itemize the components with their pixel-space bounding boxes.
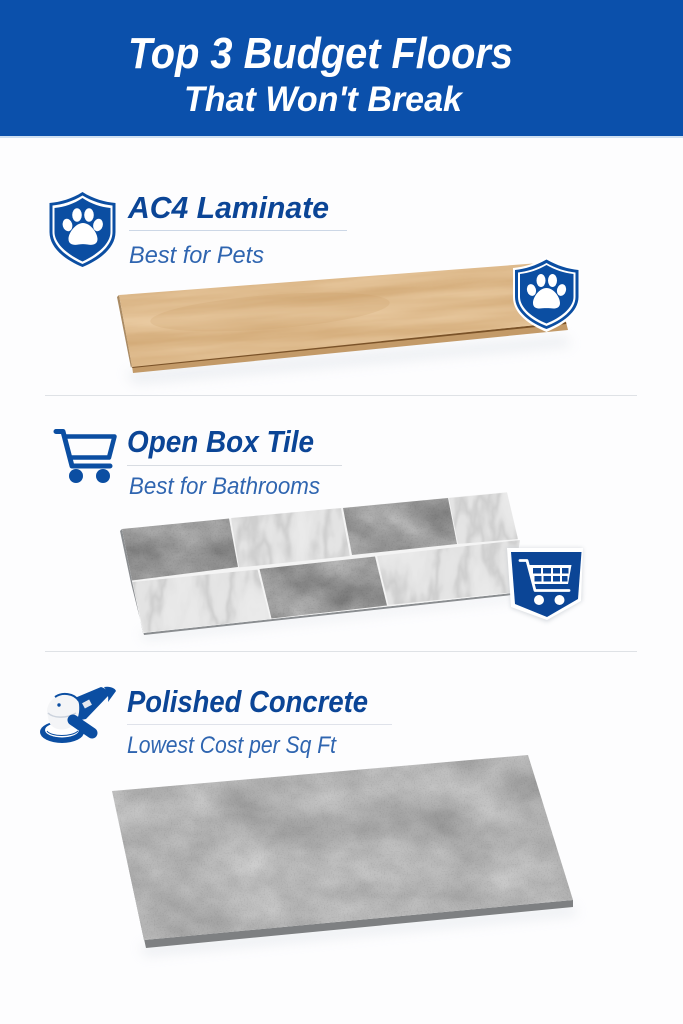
panel: Open Box Tile — [56, 424, 583, 640]
panel: Polished Concrete — [40, 684, 578, 956]
heading: Polished Concrete: Polished Concrete — [127, 684, 368, 719]
tile strip — [120, 492, 520, 640]
grinder body — [70, 687, 109, 722]
icon: paw shield — [50, 192, 116, 267]
panel: AC4 Laminate — [50, 190, 596, 424]
title: That Won't Break — [184, 80, 463, 119]
badge: shopping cart — [507, 548, 583, 622]
concrete slab — [112, 755, 578, 956]
subheading: Best for Bathrooms: Best for Bathrooms — [129, 473, 320, 500]
title — [128, 29, 513, 119]
grinder head — [47, 694, 79, 729]
grinder base disc — [40, 721, 84, 743]
badge: paw shield — [513, 257, 580, 332]
subheading: Lowest Cost per Sq Ft: Lowest Cost per Sq Ft — [127, 732, 337, 759]
icon: floor grinder — [40, 687, 116, 743]
heading: AC4 Laminate: AC4 Laminate — [127, 190, 329, 225]
title: Top 3 Budget Floors — [128, 29, 513, 78]
laminate plank — [117, 264, 568, 384]
heading: Open Box Tile: Open Box Tile — [127, 424, 314, 459]
grinder handle — [73, 720, 92, 733]
header banner — [0, 0, 683, 138]
icon: shopping cart — [56, 432, 114, 483]
subheading: Best for Pets: Best for Pets — [129, 242, 264, 269]
